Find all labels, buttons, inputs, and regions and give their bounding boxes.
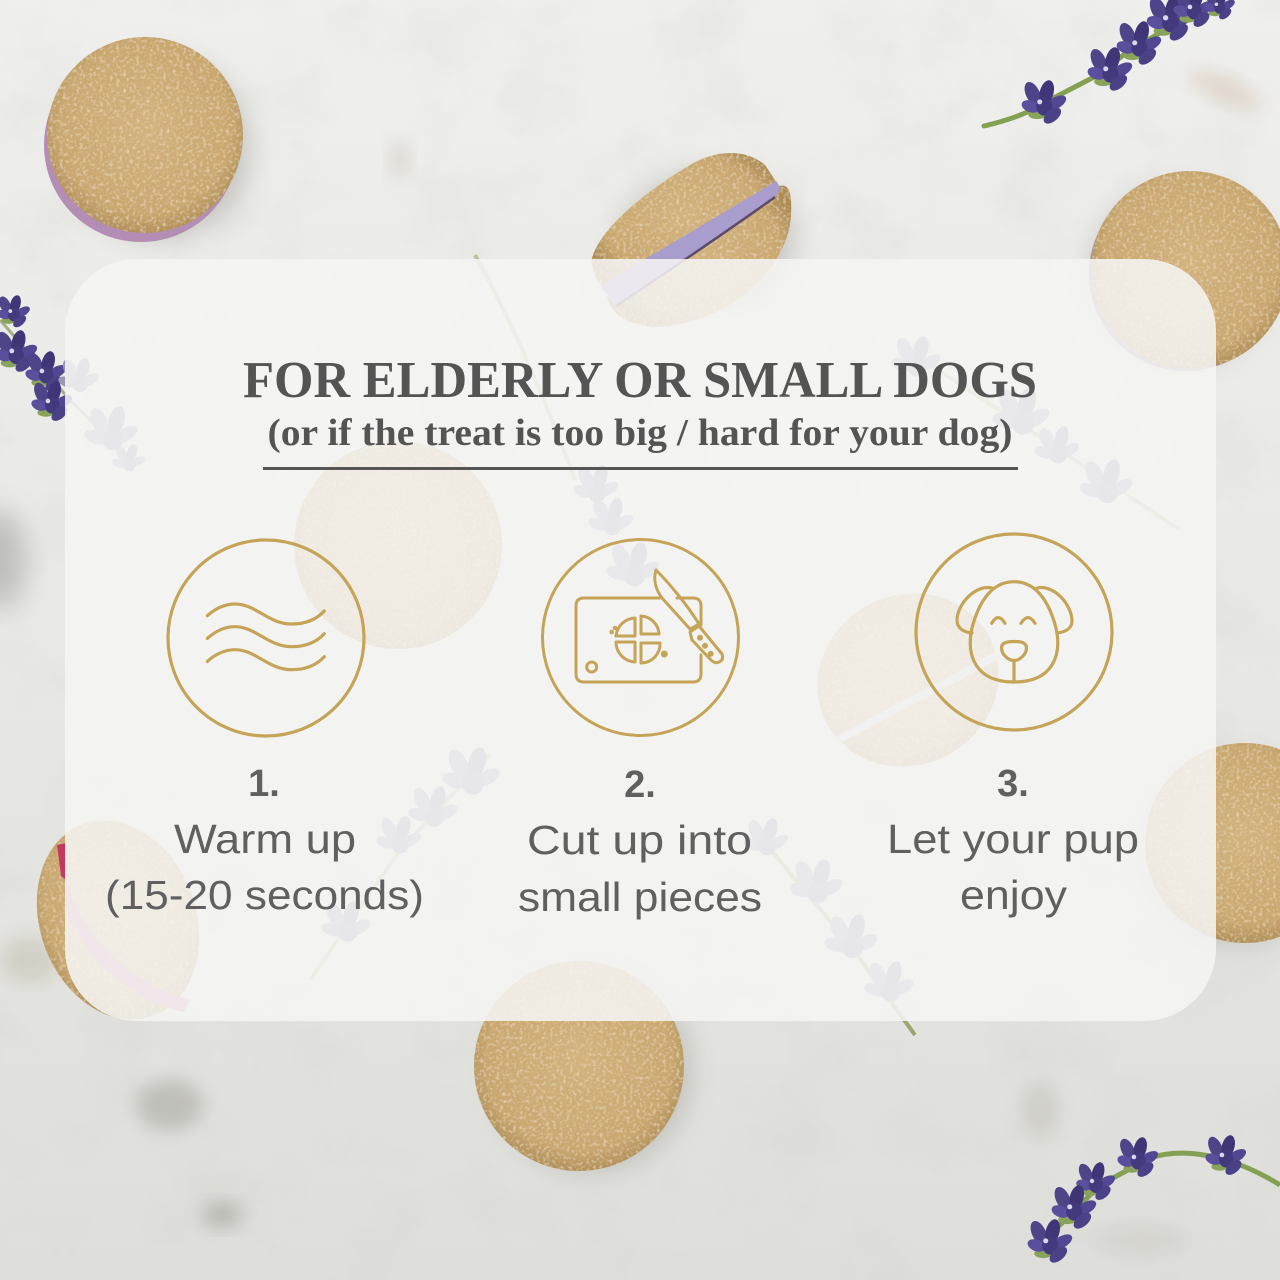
step 1 text: Warm up	[174, 816, 356, 862]
step 2 text	[518, 764, 762, 920]
step 3	[887, 534, 1139, 918]
icon: happy dog	[916, 534, 1112, 730]
icon: cutting board and knife	[542, 540, 738, 736]
macaron: top centre	[592, 153, 791, 327]
step 1 text: (15-20 seconds)	[105, 872, 424, 918]
macaron: under panel right	[787, 562, 1029, 798]
step 3 text: 3.	[997, 763, 1029, 805]
step 3 text: enjoy	[960, 872, 1068, 918]
lavender sprig: left	[0, 294, 147, 471]
step 1	[105, 540, 424, 918]
step 2 text: 2.	[624, 764, 656, 806]
icon: warm waves	[168, 540, 364, 736]
macaron: bottom centre	[474, 961, 684, 1171]
lavender sprig: bottom right	[1026, 1134, 1280, 1266]
title underline	[263, 467, 1018, 470]
macaron: under panel centre left	[294, 441, 502, 649]
title: FOR ELDERLY OR SMALL DOGS	[243, 352, 1037, 409]
macaron: left with pink filling	[10, 797, 226, 1043]
macaron: top left	[44, 37, 243, 242]
subtitle: (or if the treat is too big / hard for your dog)	[268, 412, 1012, 454]
step 1 text	[105, 763, 424, 918]
step 3 text	[887, 763, 1139, 918]
macaron: top right	[1089, 171, 1280, 371]
translucent panel	[65, 259, 1216, 1021]
step 2 text: small pieces	[518, 874, 762, 920]
step 3 text: Let your pup	[887, 816, 1139, 862]
lavender sprig: top right	[984, 0, 1237, 127]
step 1 text: 1.	[248, 763, 280, 805]
faded lavender sprigs under panel	[310, 255, 1180, 1035]
step 2	[518, 540, 762, 920]
macaron: right	[1145, 743, 1280, 943]
step 2 text: Cut up into	[527, 817, 752, 863]
